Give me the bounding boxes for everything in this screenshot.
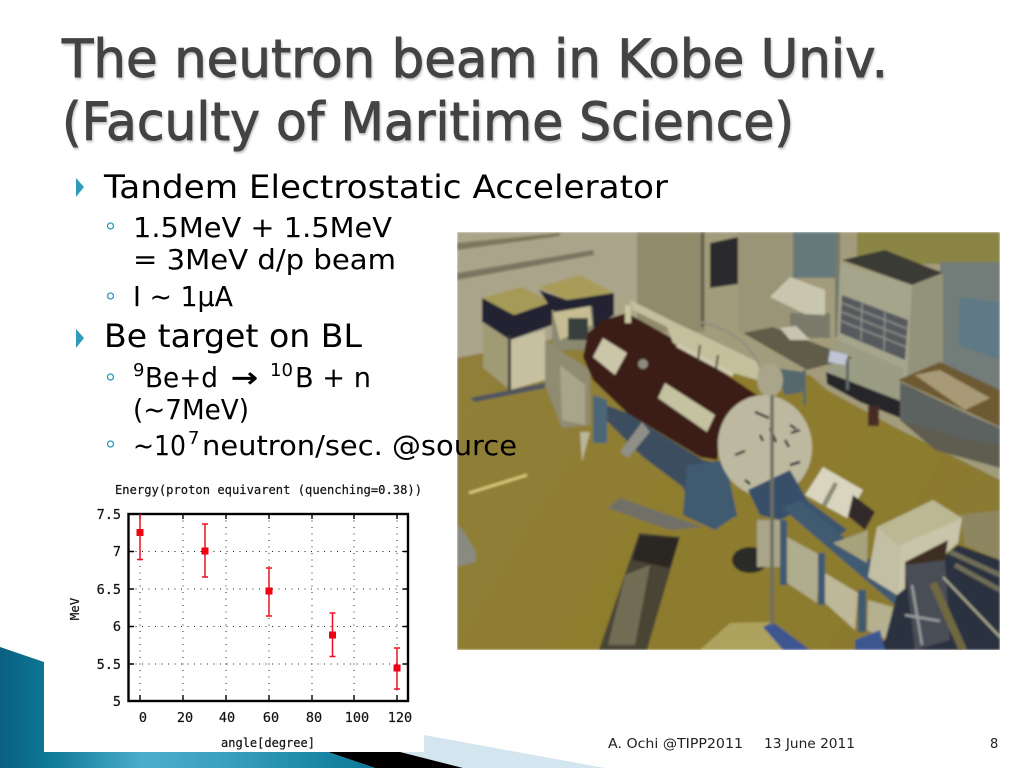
sub-bullet: current: I ~ 1µA bbox=[133, 281, 233, 313]
x axis title: angle[degree] bbox=[221, 735, 315, 750]
air conditioner bbox=[836, 264, 912, 384]
cabinets left bbox=[482, 287, 552, 315]
floor bbox=[457, 330, 1000, 650]
title: The neutron beam in Kobe Univ. bbox=[62, 31, 889, 92]
footer: author: A. Ochi @TIPP2011 bbox=[608, 737, 743, 752]
blue support under cylinder bbox=[606, 404, 737, 518]
bullet: Tandem Electrostatic Accelerator: Tandem Electrostatic Accelerator bbox=[103, 168, 669, 206]
photo: tandem accelerator room bbox=[457, 232, 1000, 650]
sub-bullet: reaction: (~7MeV) bbox=[133, 394, 249, 426]
top pipework bbox=[625, 305, 631, 323]
title: The neutron beam in Kobe Univ. bbox=[61, 29, 888, 90]
sub-bullet: reaction: Be+d bbox=[145, 362, 218, 394]
right table bbox=[900, 382, 1000, 445]
sub-bullet: reaction: → bbox=[231, 362, 258, 394]
y axis labels: 5.5 bbox=[97, 657, 121, 673]
flange and end disc bbox=[757, 363, 783, 397]
sub-bullet: neutron rate: 7 bbox=[188, 428, 199, 449]
sub-bullet: neutron rate: ~10 bbox=[133, 430, 186, 462]
x axis labels: 20 bbox=[177, 710, 193, 726]
x axis labels: 120 bbox=[388, 710, 412, 726]
sub-bullet: reaction: 9 bbox=[133, 360, 144, 381]
cylinder bbox=[583, 313, 760, 460]
instruments bbox=[732, 547, 768, 573]
wall bbox=[661, 232, 1000, 481]
x axis labels bbox=[139, 710, 412, 726]
bullet: Be target on BL: Be target on BL bbox=[104, 317, 362, 355]
sub-bullet: beam energy bbox=[108, 212, 396, 276]
y axis labels: 5 bbox=[113, 694, 121, 710]
chart: energy vs angle bbox=[44, 472, 424, 752]
y axis title: MeV bbox=[67, 597, 82, 620]
chart title: Energy(proton equivarent (quenching=0.38)) bbox=[115, 482, 422, 497]
sub-bullet: beam energy: 1.5MeV + 1.5MeV bbox=[133, 212, 392, 244]
bullet list bbox=[76, 168, 669, 462]
y axis labels: 7 bbox=[113, 544, 121, 560]
footer decoration: teal, black and pale wedges bbox=[0, 647, 605, 768]
x axis labels: 60 bbox=[263, 710, 279, 726]
y axis labels: 6.5 bbox=[97, 582, 121, 598]
x axis labels: 80 bbox=[306, 710, 322, 726]
left table bbox=[743, 327, 853, 370]
y axis labels: 6 bbox=[113, 619, 121, 635]
y axis labels bbox=[97, 507, 121, 710]
sub-bullet: neutron rate: neutron/sec. @source bbox=[202, 430, 517, 462]
sub-bullet: reaction: 10 bbox=[270, 360, 293, 381]
floor markings bbox=[469, 475, 527, 493]
sink bbox=[790, 313, 830, 338]
x axis labels: 100 bbox=[345, 710, 369, 726]
sub-bullet: neutron rate bbox=[108, 428, 517, 462]
title bbox=[61, 29, 889, 155]
x axis labels: 40 bbox=[219, 710, 235, 726]
title: (Faculty of Maritime Science) bbox=[63, 94, 795, 155]
data points with error bars bbox=[136, 514, 400, 689]
sub-bullet: beam energy: = 3MeV d/p beam bbox=[133, 244, 396, 276]
plot frame and ticks bbox=[128, 514, 408, 701]
y axis labels: 7.5 bbox=[97, 507, 121, 523]
sub-bullet: reaction: B + n bbox=[295, 362, 371, 394]
footer: date: 13 June 2011 bbox=[764, 737, 855, 752]
x axis labels: 0 bbox=[139, 710, 147, 726]
sub-bullet: reaction bbox=[108, 360, 371, 426]
footer: slide number: 8 bbox=[990, 737, 998, 752]
gridlines bbox=[129, 514, 408, 701]
title: (Faculty of Maritime Science) bbox=[62, 92, 794, 153]
